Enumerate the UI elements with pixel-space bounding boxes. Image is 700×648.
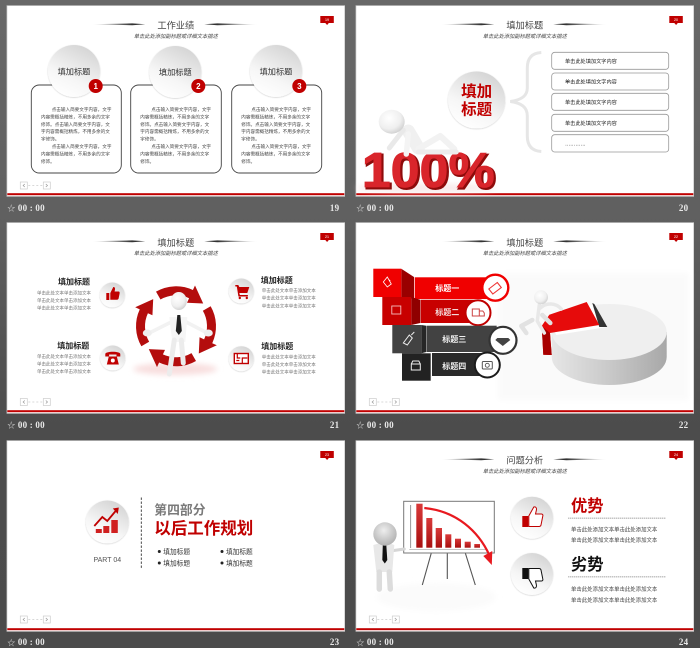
item: bottom left phone: 单击此处文本单击添加文本 <box>37 360 91 367</box>
badge: slide number flag <box>320 16 334 25</box>
item: bottom right map: 单击此处文本单击添加文本 <box>262 353 316 360</box>
card: item 1: 内容需概括精炼，不用多余的文字 <box>41 113 110 120</box>
item: top left thumbs up: 单击此处文本单击添加文本 <box>37 305 91 312</box>
badge: slide number flag <box>669 451 683 460</box>
heading: slide 22 title: 单击此处添加副标题或详细文本描述 <box>483 250 568 257</box>
block row 2: 标题二 <box>435 307 459 317</box>
icon: navigation arrows <box>369 616 399 623</box>
footer: timer and page number: 00 : 00 <box>367 420 394 430</box>
list: text boxes: ………… <box>565 142 586 148</box>
card: item 2: 内容需概括精炼，不用多余的文字 <box>140 113 210 120</box>
item: disadvantage: 劣势 <box>571 555 604 574</box>
icon: navigation arrows <box>20 398 50 406</box>
badge: slide number flag: 22 <box>674 235 678 239</box>
footer: timer and page number: 23 <box>330 637 340 647</box>
icon: navigation arrows <box>369 398 399 406</box>
card: item 1: 1 <box>93 82 98 91</box>
icon: navigation arrows <box>20 616 50 623</box>
icon: growth chart disc <box>86 500 129 544</box>
badge: slide number flag <box>669 16 683 25</box>
card: item 2: 点击输入简要文字内容，文字 <box>151 143 211 150</box>
footer: timer and page number: 00 : 00 <box>367 637 394 647</box>
footer: timer and page number <box>7 203 340 213</box>
heading: slide 20 title: 填加标题 <box>506 20 543 30</box>
card: item 2: 字修饰。 <box>140 136 159 143</box>
illustration: figure on 100%: 100% <box>362 144 495 198</box>
block row 1 <box>373 269 508 301</box>
item: advantage: 单击此处添加文本单击此处添加文本 <box>571 536 658 544</box>
card: item 3: 字修饰。 <box>241 136 260 143</box>
item: top right cart: 单击此处文本单击添加文本 <box>262 295 316 302</box>
heading: slide 22 title <box>440 237 607 257</box>
card: item 2: 字内容需概括精炼，不用多余的文 <box>140 128 210 135</box>
card: item 1: 填加标题 <box>58 66 90 76</box>
card: item 3 <box>232 45 322 173</box>
card: item 3: 点击输入简要文字内容，文字 <box>251 143 311 150</box>
item: top left thumbs up: 填加标题 <box>58 276 90 286</box>
heading: slide 20 title: 单击此处添加副标题或详细文本描述 <box>483 33 568 40</box>
card: item 1 <box>31 45 121 173</box>
footer: timer and page number: 20 <box>679 203 689 213</box>
footer: timer and page number: 21 <box>330 420 340 430</box>
list: four bullet items: 填加标题 <box>163 547 190 556</box>
list: text boxes <box>552 52 669 152</box>
heading: slide 21 title: 单击此处添加副标题或详细文本描述 <box>134 250 219 257</box>
icon: navigation arrows <box>20 182 50 189</box>
card: item 1: 点击输入简要文字内容，文字 <box>52 143 112 150</box>
block row 2 <box>382 297 490 325</box>
card: item 1: 字修饰。 <box>41 136 59 143</box>
item: bottom right map: 填加标题 <box>261 341 293 351</box>
card: item 3: 内容需概括精炼，不用多余的文字 <box>241 113 311 120</box>
item: top right cart: 单击此处文本单击添加文本 <box>262 287 316 294</box>
heading: slide 24 title: 单击此处添加副标题或详细文本描述 <box>483 468 568 475</box>
badge: slide number flag <box>320 451 334 460</box>
panel: slide 22 stacked blocks and pie <box>356 222 694 430</box>
panel: slide 19 work performance <box>7 5 345 213</box>
circle: add title <box>448 72 505 128</box>
card: item 2: 修饰。点击输入简要文字内容，文 <box>140 121 210 128</box>
list: four bullet items: 填加标题 <box>163 558 190 568</box>
item: top left thumbs up: 单击此处文本单击添加文本 <box>37 297 91 304</box>
footer: timer and page number: ☆ <box>7 204 15 213</box>
list: text boxes: 单击此处填加文字内容 <box>565 78 617 86</box>
block row 4: 标题四 <box>442 361 466 371</box>
card: item 1: 修饰。点击输入简要文字内容，文 <box>41 121 110 128</box>
item: bottom left phone <box>37 340 125 375</box>
badge: slide number flag: 23 <box>325 453 329 457</box>
footer: timer and page number: ☆ <box>7 638 15 648</box>
card: item 2: 2 <box>196 82 201 91</box>
illustration: figure on 100%: 100% <box>363 146 496 200</box>
heading: part number: 第四部分 <box>154 502 206 518</box>
heading: slide 24 title: 问题分析 <box>506 454 543 466</box>
circle: add title: 填加 <box>461 82 492 100</box>
footer: timer and page number <box>356 637 689 648</box>
footer: timer and page number: ☆ <box>356 638 364 648</box>
badge: slide number flag: 24 <box>674 453 678 457</box>
block row 1: 标题一 <box>435 283 459 293</box>
illustration: presenter with falling bar chart <box>373 501 496 611</box>
footer: timer and page number: 24 <box>679 637 689 647</box>
item: disadvantage <box>511 553 666 604</box>
footer: timer and page number <box>356 203 689 213</box>
panel: slide 23 part four <box>7 440 345 648</box>
panel: slide 24 problem analysis <box>356 440 694 648</box>
card: item 1: 修饰。 <box>41 158 55 165</box>
footer: timer and page number <box>7 637 340 648</box>
item: top left thumbs up: 单击此处文本单击添加文本 <box>37 290 91 296</box>
badge: slide number flag: 19 <box>325 18 329 22</box>
panel: slide 20 100 percent <box>356 5 694 213</box>
card: item 2 <box>131 46 221 173</box>
card: item 2: 填加标题 <box>159 67 192 77</box>
item: bottom left phone: 填加标题 <box>57 340 89 350</box>
item: advantage: 优势 <box>571 496 604 516</box>
heading: slide 22 title: 填加标题 <box>506 237 543 248</box>
footer: timer and page number: 00 : 00 <box>18 637 45 647</box>
card: item 1: 点击输入简要文字内容，文字 <box>52 106 112 113</box>
item: disadvantage: 单击此处添加文本单击此处添加文本 <box>571 596 658 604</box>
card: item 2: 点击输入简要文字内容，文字 <box>151 106 211 113</box>
list: four bullet items: 填加标题 <box>226 558 253 568</box>
footer: timer and page number: ☆ <box>7 421 15 430</box>
item: top left thumbs up <box>37 276 125 312</box>
card: item 2: 内容需概括精炼，不用多余的文字 <box>140 150 210 157</box>
heading: slide 20 title <box>440 20 607 40</box>
footer: timer and page number: 00 : 00 <box>18 203 45 213</box>
item: advantage: 单击此处添加文本单击此处添加文本 <box>571 526 658 534</box>
card: item 3: 修饰。 <box>241 158 255 165</box>
card: item 1: 内容需概括精炼，不用多余的文字 <box>41 150 110 157</box>
footer: timer and page number: ☆ <box>356 421 364 430</box>
brace <box>510 52 541 152</box>
badge: slide number flag: 20 <box>674 18 678 22</box>
heading: slide 19 title: 单击此处添加副标题或详细文本描述 <box>134 33 219 40</box>
card: item 3: 修饰。点击输入简要文字内容，文 <box>241 121 311 128</box>
heading: slide 24 title <box>440 454 607 475</box>
illustration: arrows cycle with figure <box>133 286 217 375</box>
footer: timer and page number: ☆ <box>356 204 364 213</box>
card: item 1: 字内容需概括精炼，不用多余的文 <box>41 128 110 135</box>
heading: slide 21 title: 填加标题 <box>157 237 194 248</box>
heading: slide 21 title <box>91 237 258 257</box>
footer: timer and page number: 22 <box>679 420 689 430</box>
list: text boxes: 单击此处填加文字内容 <box>565 57 617 65</box>
item: top right cart: 单击此处文本单击添加文本 <box>262 302 316 309</box>
heading: future work plan: 以后工作规划 <box>154 519 253 538</box>
item: bottom left phone: 单击此处文本单击添加文本 <box>37 368 91 375</box>
card: item 2: 修饰。 <box>140 158 154 165</box>
list: four bullet items: 填加标题 <box>226 547 253 556</box>
card: item 3: 字内容需概括精炼，不用多余的文 <box>241 128 311 135</box>
list: text boxes: 单击此处填加文字内容 <box>565 119 617 127</box>
heading: slide 19 title: 工作业绩 <box>157 20 194 30</box>
item: top right cart <box>229 275 316 309</box>
card: item 3: 点击输入简要文字内容，文字 <box>251 106 311 113</box>
footer: timer and page number: 19 <box>330 203 340 213</box>
card: item 3: 3 <box>297 82 302 91</box>
footer: timer and page number: 00 : 00 <box>367 203 394 213</box>
item: top right cart: 填加标题 <box>261 275 293 285</box>
item: bottom right map: 单击此处文本单击添加文本 <box>262 361 316 368</box>
block row 3: 标题三 <box>442 334 466 344</box>
list: text boxes: 单击此处填加文字内容 <box>565 98 617 106</box>
item: bottom right map: 单击此处文本单击添加文本 <box>262 369 316 376</box>
footer: timer and page number <box>7 420 340 430</box>
heading: slide 19 title <box>91 20 258 40</box>
circle: add title: 标题 <box>461 100 493 118</box>
illustration: pie chart with figure <box>498 273 688 400</box>
list: four bullet items <box>158 547 253 568</box>
panel: slide 21 circular arrows <box>7 222 345 430</box>
item: disadvantage: 单击此处添加文本单击此处添加文本 <box>571 585 658 593</box>
card: item 3: 填加标题 <box>260 66 292 76</box>
item: advantage <box>511 496 666 544</box>
illustration: figure on 100% <box>356 110 496 200</box>
block row 3 <box>392 325 516 354</box>
badge: slide number flag <box>669 233 683 242</box>
badge: slide number flag <box>320 233 334 242</box>
item: bottom left phone: 单击此处文本单击添加文本 <box>37 353 91 360</box>
card: item 3: 内容需概括精炼，不用多余的文字 <box>241 150 311 157</box>
block row 4 <box>402 352 500 381</box>
footer: timer and page number <box>356 420 689 430</box>
badge: slide number flag: 21 <box>325 235 329 239</box>
label: part 04: PART 04 <box>93 557 121 564</box>
footer: timer and page number: 00 : 00 <box>18 420 45 430</box>
divider: dashed vertical line <box>140 498 142 569</box>
item: bottom right map <box>229 341 316 376</box>
